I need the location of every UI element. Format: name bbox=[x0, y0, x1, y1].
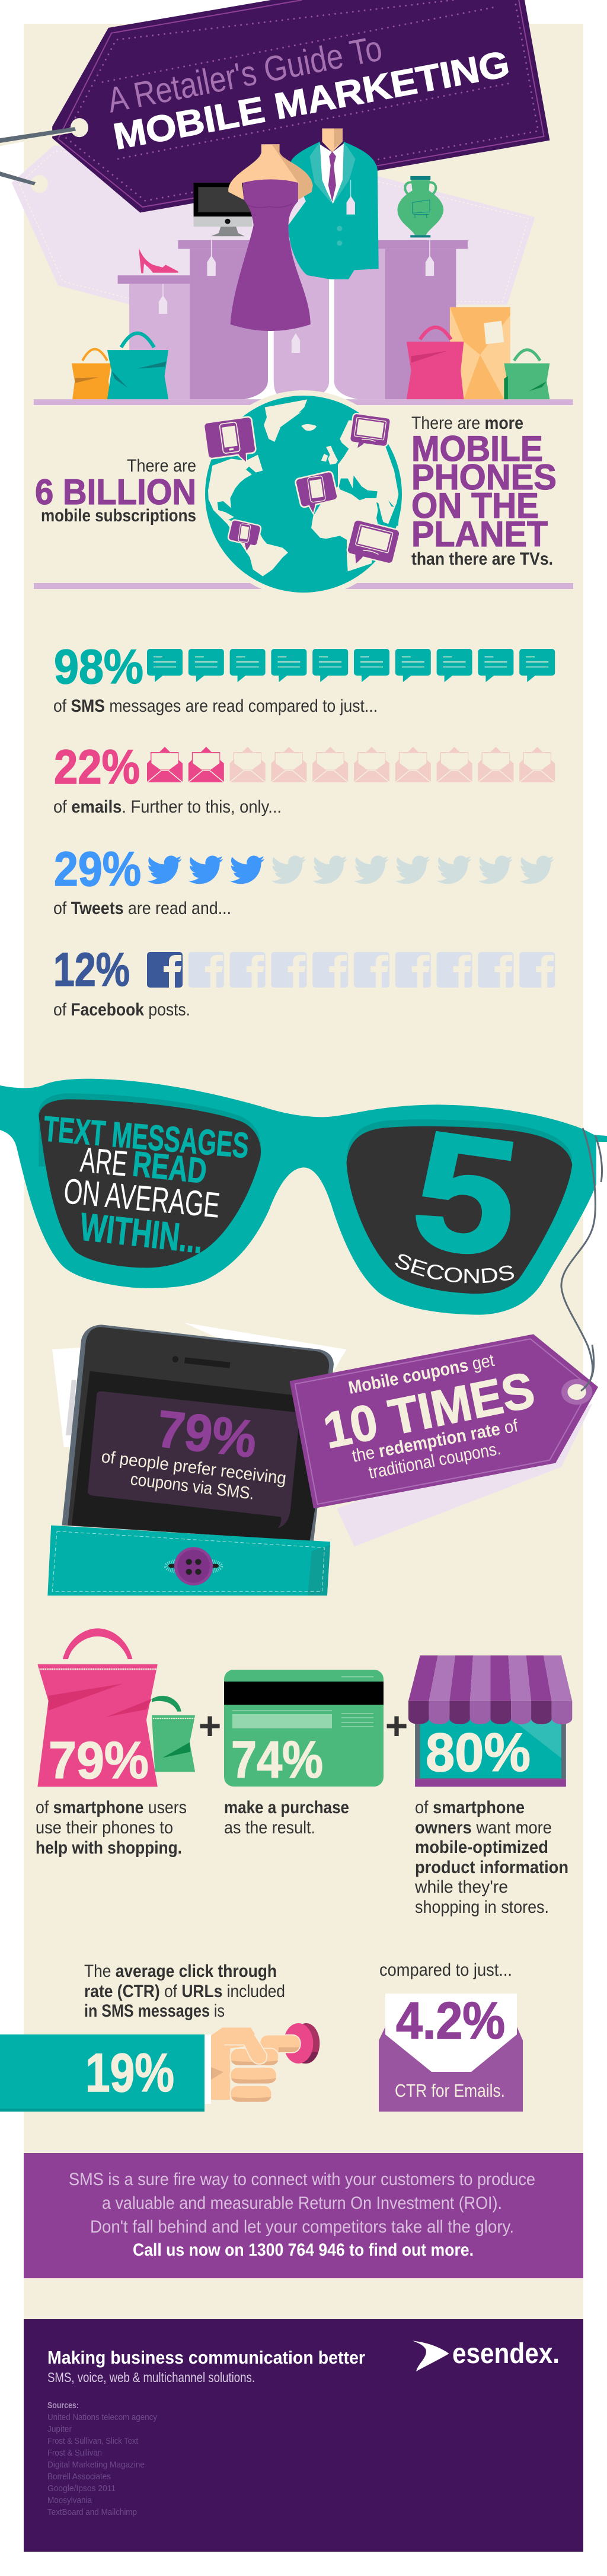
text: purchase: as the result. bbox=[224, 1818, 315, 1838]
sources list bbox=[47, 2400, 157, 2517]
sources list: Sources: bbox=[47, 2400, 79, 2411]
stat: 12% Facebook: of Facebook posts. bbox=[53, 1000, 190, 1020]
left lens text: ARE bbox=[79, 1139, 129, 1184]
continents bbox=[208, 399, 398, 577]
right lens: 5 seconds: SECONDS bbox=[395, 1254, 515, 1284]
panel: hero illustration with title tag bbox=[0, 0, 573, 405]
text: more mobile phones on the planet than TVs: ON THE bbox=[411, 486, 539, 526]
left lens text: WITHIN... bbox=[78, 1204, 205, 1262]
bubble: middle phone bbox=[296, 472, 339, 515]
panel: call to action bbox=[24, 2153, 583, 2278]
left lens text: READ bbox=[131, 1144, 209, 1191]
mannequin: purple dress bbox=[228, 144, 313, 331]
stat: 12% Facebook: 12% bbox=[53, 943, 130, 996]
icon row: speech bubbles bbox=[147, 649, 555, 682]
icon row: facebook squares bbox=[147, 952, 555, 988]
mannequin stands bbox=[244, 275, 358, 399]
sources list: Digital Marketing Magazine bbox=[47, 2460, 145, 2470]
pale lilac back tag bbox=[0, 145, 535, 304]
phone text: 79% bbox=[154, 1399, 260, 1469]
plus sign: + bbox=[199, 1703, 221, 1747]
globe with device speech bubbles bbox=[200, 390, 407, 598]
title: A Retailer's Guide To: A Retailer's Guide To bbox=[104, 28, 385, 120]
bubble: small TV bbox=[349, 414, 390, 452]
stat: 74% credit card bbox=[224, 1670, 384, 1838]
panel: footer bbox=[24, 2319, 583, 2552]
stat: 29% tweets: of Tweets are read and... bbox=[53, 899, 231, 918]
display tables and shelf bbox=[34, 240, 573, 405]
text: mobile optimized info: of smartphone bbox=[415, 1798, 525, 1817]
logo: esendex bbox=[413, 2338, 560, 2371]
text: mobile optimized info bbox=[414, 1798, 568, 1917]
stat: 80% shop front bbox=[408, 1655, 572, 1917]
sunglasses illustration bbox=[0, 1078, 607, 1381]
coupon text: traditional coupons. bbox=[367, 1439, 502, 1483]
icon: button bbox=[283, 2023, 320, 2064]
stat: 22% emails: 22% bbox=[54, 740, 140, 794]
footer subheading: SMS, voice, web & multichannel solutions. bbox=[47, 2370, 255, 2385]
text: more mobile phones on the planet than TVs bbox=[411, 413, 557, 569]
shopping bags and parcel, right bbox=[407, 307, 550, 399]
bubble: large phone bbox=[205, 417, 257, 467]
phone in pocket with 79% stat bbox=[47, 1323, 347, 1596]
icon row: envelopes bbox=[147, 747, 555, 782]
coupon text: the redemption rate of bbox=[350, 1416, 520, 1466]
icon: pointing hand bbox=[211, 2027, 301, 2102]
panel: call to action: SMS is a sure fire way to connect with your customers to produce bbox=[69, 2170, 535, 2189]
text: average click through rate: rate (CTR) of URLs included bbox=[84, 1982, 285, 2001]
bubble: small phone bbox=[227, 520, 261, 552]
left lens text bbox=[42, 1109, 250, 1262]
text: There are 6 billion mobile subscriptions: mobile subscriptions bbox=[41, 506, 196, 526]
stat: 29% tweets bbox=[53, 842, 554, 918]
stat: 22% emails bbox=[53, 740, 555, 817]
envelope with 4.2%: 4.2% bbox=[396, 1991, 505, 2050]
phone text: coupons via SMS. bbox=[129, 1470, 255, 1504]
text: average click through rate bbox=[84, 1962, 285, 2021]
panel: call to action: Call us now on 1300 764 946 to find out more. bbox=[133, 2240, 474, 2260]
envelope with 4.2% bbox=[379, 1991, 523, 2112]
19% sleeve with hand pressing button bbox=[0, 2023, 320, 2112]
stat: 12% Facebook bbox=[53, 943, 555, 1020]
sources list: Google/Ipsos 2011 bbox=[47, 2483, 116, 2494]
text: average click through rate: The average click through bbox=[84, 1962, 277, 1981]
sources list: Borrell Associates bbox=[47, 2472, 111, 2482]
sleeve bbox=[0, 2034, 211, 2112]
left lens text: ON AVERAGE bbox=[62, 1171, 222, 1225]
19% sleeve with hand pressing button: 19% bbox=[85, 2043, 174, 2103]
text: more mobile phones on the planet than TVs: than there are TVs. bbox=[411, 549, 553, 569]
stat: 79% shopping bag: 79% bbox=[49, 1731, 149, 1789]
cord from sunglasses to coupon tag bbox=[561, 1128, 602, 1391]
mannequin: suit jacket bbox=[289, 129, 379, 279]
stat: 98% SMS messages: 98% bbox=[54, 640, 143, 694]
icon: shopping bags bbox=[37, 1628, 195, 1787]
coupon text: Mobile coupons get bbox=[347, 1351, 496, 1398]
text: shopping help bbox=[36, 1798, 187, 1858]
stat: 80% shop front: 80% bbox=[426, 1722, 531, 1783]
phone text bbox=[100, 1399, 287, 1504]
shopping bags, left bbox=[72, 333, 168, 399]
plus sign: + bbox=[385, 1703, 408, 1747]
text: purchase: make a purchase bbox=[224, 1798, 349, 1817]
stat: 22% emails: of emails. Further to this, only... bbox=[53, 797, 282, 817]
footer heading: Making business communication better bbox=[47, 2347, 365, 2368]
icon: green vase bbox=[397, 176, 443, 237]
teal pocket with button bbox=[47, 1526, 330, 1596]
text: mobile optimized info: while they're bbox=[414, 1877, 508, 1897]
text: mobile optimized info: owners want more bbox=[415, 1818, 552, 1838]
icon: desktop computer bbox=[194, 183, 253, 236]
text: shopping help: of smartphone users bbox=[36, 1798, 187, 1817]
coupon text: 10 TIMES bbox=[319, 1362, 539, 1460]
stat: 74% credit card: 74% bbox=[231, 1730, 323, 1789]
stat: 98% SMS messages bbox=[53, 640, 555, 716]
text: mobile optimized info: mobile-optimized bbox=[415, 1838, 548, 1857]
stat: 79% shopping bag bbox=[36, 1628, 195, 1858]
text: mobile optimized info: shopping in stores. bbox=[415, 1897, 549, 1917]
text: There are 6 billion mobile subscriptions: 6 BILLION bbox=[35, 472, 196, 512]
coupon price tag bbox=[290, 1334, 598, 1546]
text: more mobile phones on the planet than TVs: PHONES bbox=[411, 457, 557, 497]
envelope with 4.2%: CTR for Emails. bbox=[395, 2080, 505, 2101]
text: more mobile phones on the planet than TVs: PLANET bbox=[411, 514, 548, 554]
seas bbox=[339, 476, 400, 526]
text: purchase bbox=[224, 1798, 349, 1838]
text: more mobile phones on the planet than TVs: MOBILE bbox=[411, 429, 543, 469]
sources list: Frost & Sullivan, Slick Text bbox=[47, 2436, 139, 2446]
sources list: Jupiter bbox=[47, 2424, 72, 2434]
purple title tag bbox=[0, 0, 550, 212]
icon: pink high heel bbox=[139, 247, 178, 273]
icon: credit card bbox=[224, 1670, 384, 1787]
text: shopping help: help with shopping. bbox=[36, 1838, 182, 1858]
text: There are 6 billion mobile subscriptions bbox=[35, 456, 196, 526]
sources list: Moosylvania bbox=[47, 2495, 92, 2505]
icon row: birds bbox=[147, 856, 554, 884]
right lens: 5 seconds: 5 bbox=[402, 1096, 529, 1293]
left lens text: TEXT MESSAGES bbox=[42, 1109, 250, 1166]
text: shopping help: use their phones to bbox=[36, 1818, 173, 1838]
bubble: large TV bbox=[345, 520, 400, 572]
text: more mobile phones on the planet than TVs: There are more bbox=[411, 413, 523, 433]
sources list: Frost & Sullivan bbox=[47, 2448, 102, 2458]
sources list: TextBoard and Mailchimp bbox=[47, 2507, 137, 2517]
shelf divider under globe bbox=[34, 583, 573, 589]
text: compared to just: compared to just... bbox=[379, 1960, 512, 1980]
title: MOBILE MARKETING: MOBILE MARKETING bbox=[110, 43, 513, 158]
panel: call to action: a valuable and measurable Return On Investment (ROI). bbox=[102, 2193, 502, 2213]
icon: store with awning bbox=[408, 1655, 572, 1787]
text: mobile optimized info: product information bbox=[415, 1858, 568, 1877]
phone text: of people prefer receiving bbox=[100, 1447, 287, 1488]
text: There are 6 billion mobile subscriptions: There are bbox=[127, 456, 196, 476]
stat: 29% tweets: 29% bbox=[54, 842, 141, 896]
stat: 98% SMS messages: of SMS messages are read compared to just... bbox=[53, 696, 378, 716]
sources list: United Nations telecom agency bbox=[47, 2412, 157, 2422]
logo: esendex: esendex. bbox=[452, 2338, 560, 2370]
panel: call to action: Don't fall behind and let your competitors take all the glory. bbox=[90, 2217, 514, 2237]
text: average click through rate: in SMS messages is bbox=[84, 2001, 225, 2021]
